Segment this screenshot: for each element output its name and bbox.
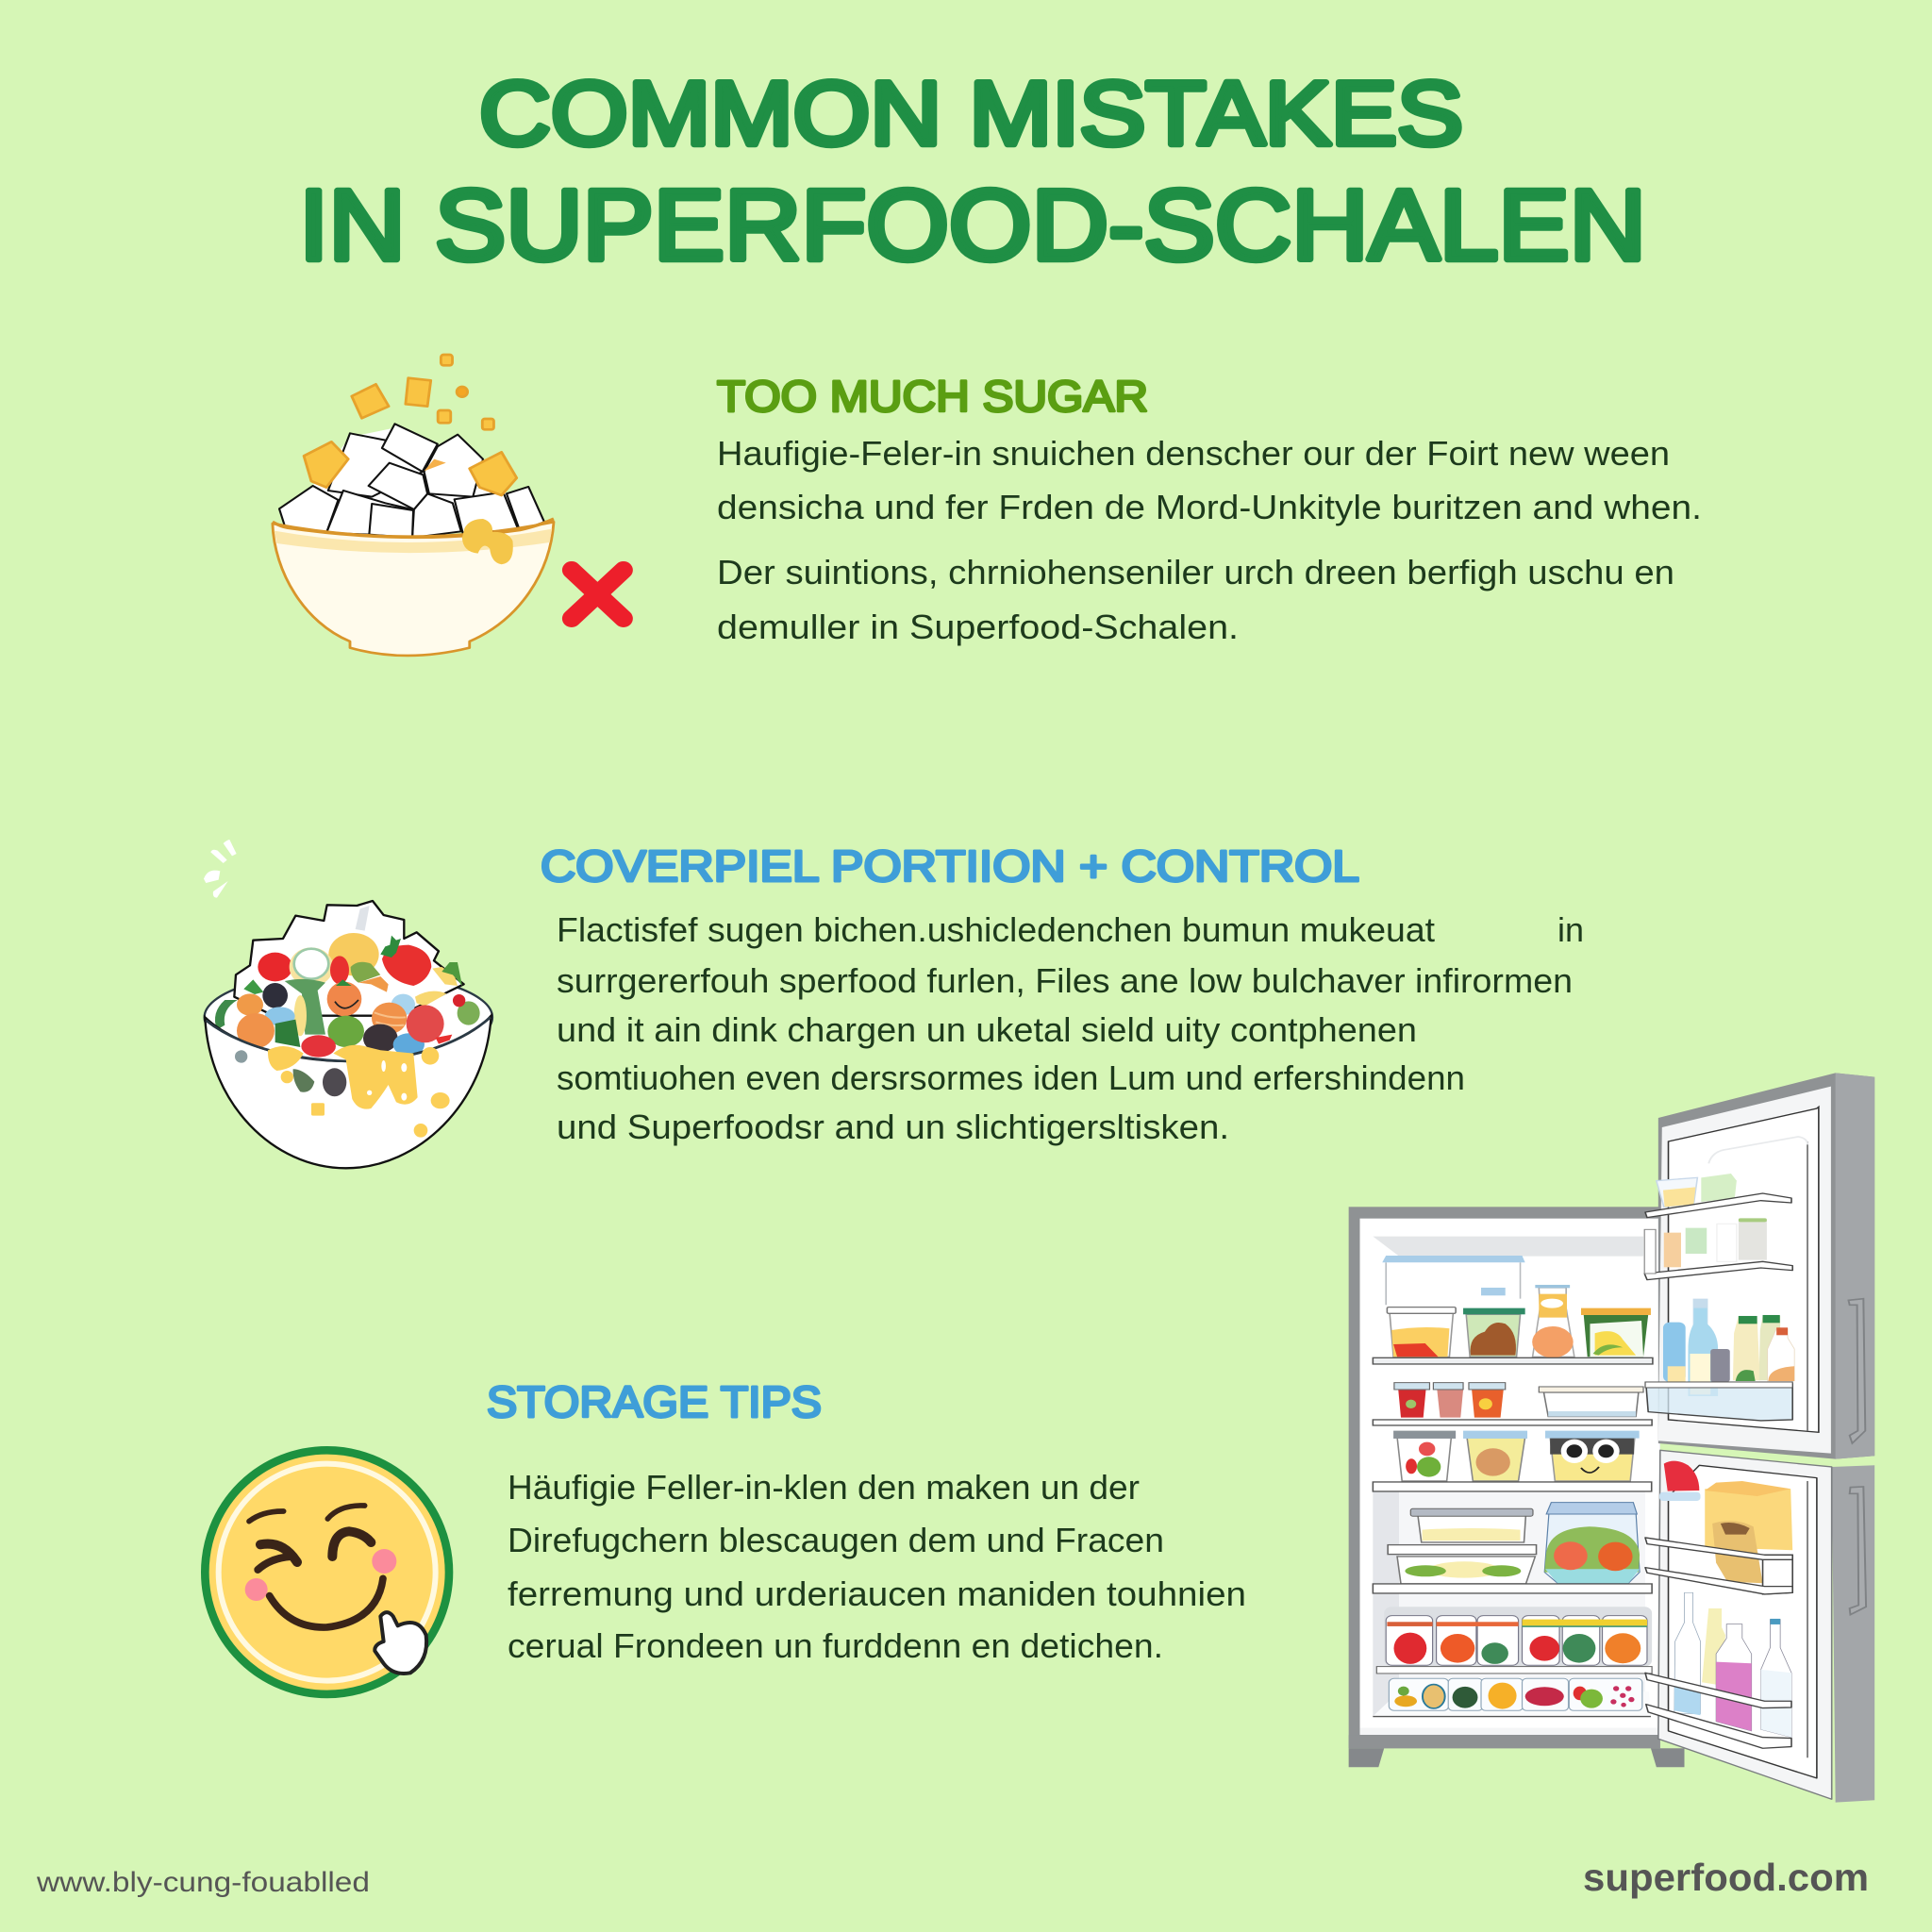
title (299, 63, 1646, 281)
illustration: open fridge (1349, 1073, 1874, 1803)
text block: too much sugar (717, 434, 1702, 646)
text block: too much sugar: demuller in Superfood-Schalen. (717, 608, 1239, 646)
fourth shelf containers (1373, 1503, 1652, 1593)
footer: left url: www.bly-cung-fouablled (36, 1867, 370, 1898)
bowl interior (205, 972, 492, 1063)
icon: bowl of sugar cubes (273, 355, 624, 656)
crisper trays (1373, 1607, 1652, 1717)
yellow drips (268, 1045, 450, 1138)
title: COMMON MISTAKES (479, 63, 1463, 164)
text block: too much sugar: Haufigie-Feler-in snuichen denscher our der Foirt new ween (717, 434, 1670, 473)
text block: too much sugar: Der suintions, chrniohenseniler urch dreen berfigh uschu en (717, 553, 1674, 591)
text block: portion control (557, 910, 1584, 1146)
icon: smiling face (205, 1450, 449, 1694)
text block: storage tips: Direfugchern blescaugen dem und Fracen (508, 1521, 1164, 1559)
cabinet bottom band (1349, 1735, 1660, 1748)
text block: storage tips: ferremung und urderiaucen maniden touhnien (508, 1574, 1246, 1613)
fruit pile (215, 933, 480, 1058)
upper door (1658, 1073, 1874, 1459)
icon: pointing hand (375, 1612, 426, 1674)
lower door (1645, 1450, 1874, 1803)
text block: storage tips: cerual Frondeen un furddenn en detichen. (508, 1626, 1163, 1665)
middle shelf and cups (1373, 1357, 1653, 1425)
text block: portion control: somtiuohen even dersrsormes iden Lum und erfershindenn (557, 1058, 1465, 1097)
text block: portion control: und it ain dink chargen un uketal sield uity contphenen (557, 1010, 1417, 1049)
bowl body (205, 1016, 491, 1168)
text block: portion control: und Superfoodsr and un slichtigersltisken. (557, 1108, 1229, 1146)
fridge cabinet (1349, 1207, 1685, 1767)
text block: portion control: in (1557, 910, 1584, 949)
lower sections (1349, 1431, 1874, 1803)
heading: portion control: COVERPIEL PORTIION + CONTROL (541, 841, 1359, 891)
icon: overfilled superfood bowl (204, 840, 492, 1168)
third shelf containers (1373, 1431, 1652, 1491)
title: IN SUPERFOOD-SCHALEN (299, 170, 1646, 281)
text block: portion control: surrgererfouh sperfood furlen, Files ane low bulchaver infirormen (557, 961, 1573, 1000)
heading: too much sugar: TOO MUCH SUGAR (717, 372, 1148, 421)
text block: storage tips: Häufigie Feller-in-klen den maken un der (508, 1468, 1140, 1507)
footer: brand: superfood.com (1583, 1856, 1869, 1899)
heading: storage tips: STORAGE TIPS (487, 1377, 822, 1426)
upper door shelves (1644, 1174, 1794, 1421)
sugar bowl body (273, 519, 554, 656)
text block: storage tips (508, 1468, 1246, 1665)
top shelf items (1382, 1256, 1651, 1357)
red cross (572, 570, 624, 619)
text block: portion control: Flactisfef sugen bichen.ushicledenchen bumun mukeuat (557, 910, 1435, 949)
text block: too much sugar: densicha und fer Frden de Mord-Unkityle buritzen and when. (717, 488, 1702, 526)
